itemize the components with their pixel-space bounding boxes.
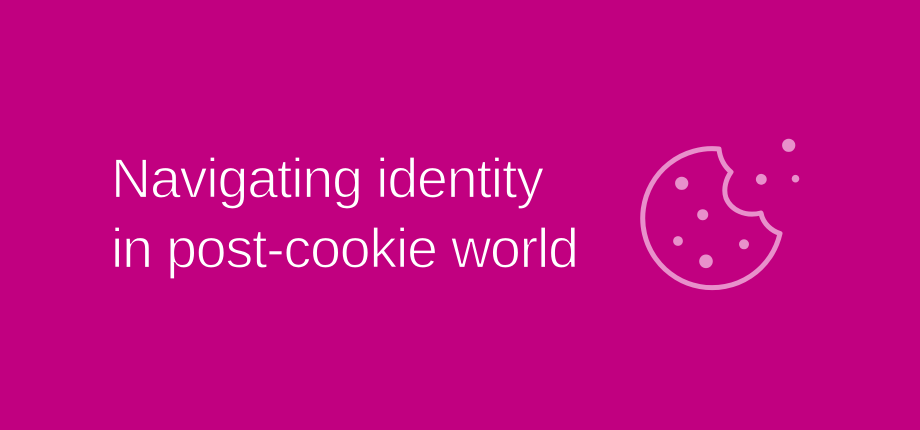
cookie outline <box>643 149 780 288</box>
title: in post-cookie world <box>111 218 579 280</box>
title <box>111 148 579 280</box>
cookie chips and crumbs <box>673 139 799 268</box>
icon: bitten cookie with crumbs <box>643 139 799 288</box>
title: Navigating identity <box>111 148 544 210</box>
